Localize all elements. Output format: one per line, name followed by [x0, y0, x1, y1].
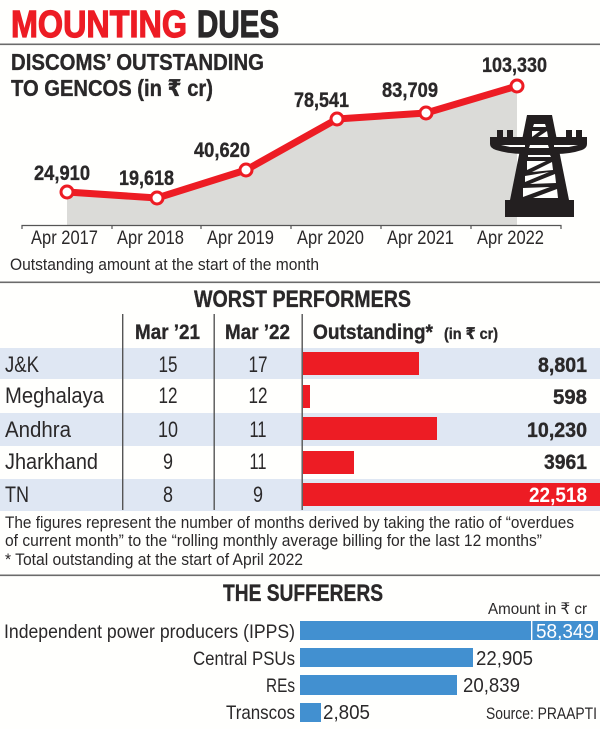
table notes: [5, 514, 574, 569]
table heading: WORST PERFORMERS: [194, 286, 411, 313]
area under line: [67, 86, 517, 225]
x axis: Apr 2021: [387, 228, 454, 249]
data values: 83,709: [382, 79, 438, 102]
data values: [34, 54, 547, 190]
outstanding values: [527, 354, 587, 507]
x axis: Apr 2022: [477, 228, 544, 249]
state names: Meghalaya: [5, 383, 105, 408]
chart heading: DISCOMS’ OUTSTANDING: [11, 49, 264, 75]
column headers: Mar ’22: [225, 321, 290, 344]
category labels: Transcos: [226, 702, 295, 724]
chart footnote: Outstanding amount at the start of the month: [10, 256, 319, 274]
Mar 21 values: 12: [158, 383, 178, 408]
data values: 24,910: [34, 162, 90, 185]
category labels: Independent power producers (IPPS): [4, 621, 295, 643]
column headers: (in ₹ cr): [444, 326, 498, 343]
panel: the sufferers bar chart: [4, 580, 598, 724]
Mar 21 values: 15: [158, 352, 178, 377]
category labels: Central PSUs: [193, 648, 295, 670]
bar values: 2,805: [323, 702, 370, 724]
state names: Jharkhand: [5, 449, 98, 474]
x axis: [22, 226, 561, 249]
chart heading: [11, 49, 264, 101]
Mar 21 values: 8: [163, 482, 173, 507]
table notes: The figures represent the number of months derived by taking the ratio of “overdues: [5, 514, 574, 532]
outstanding values: 10,230: [527, 419, 587, 442]
bar values: 22,905: [476, 648, 533, 670]
blue bars: [300, 621, 598, 722]
data values: 40,620: [194, 139, 250, 162]
Mar 21 values: 10: [158, 417, 178, 442]
outstanding values: 3961: [544, 451, 587, 474]
outstanding values: 598: [553, 386, 587, 409]
Mar 22 values: [248, 352, 268, 507]
outstanding values: 22,518: [529, 484, 587, 507]
outstanding bars: [303, 352, 600, 506]
state names: Andhra: [5, 417, 72, 442]
data values: 103,330: [482, 54, 547, 77]
icon: transmission tower: [490, 115, 587, 217]
bar values: 20,839: [463, 675, 520, 697]
bar values: [323, 621, 594, 724]
panel: discoms outstanding line chart: [10, 49, 587, 274]
bar values: 58,349: [536, 621, 594, 643]
row bands: [0, 348, 600, 511]
state names: TN: [5, 482, 29, 507]
data values: 78,541: [294, 89, 349, 112]
Mar 22 values: 11: [250, 449, 266, 474]
column headers: [135, 321, 498, 344]
table notes: of current month” to the “rolling monthly average billing for the last 12 months”: [5, 532, 542, 550]
x axis: Apr 2017: [31, 228, 98, 249]
sufferers heading: THE SUFFERERS: [223, 580, 383, 607]
x axis: Apr 2018: [117, 228, 184, 249]
column headers: Outstanding*: [313, 321, 434, 344]
table notes: * Total outstanding at the start of April 2022: [5, 551, 303, 569]
Mar 22 values: 9: [253, 482, 263, 507]
unit label: Amount in ₹ cr: [488, 601, 588, 618]
Mar 22 values: 17: [248, 352, 268, 377]
state names: J&K: [5, 352, 39, 377]
chart heading: TO GENCOS (in ₹ cr): [11, 75, 213, 101]
data values: 19,618: [119, 167, 174, 190]
title: MOUNTING: [11, 4, 187, 46]
outstanding values: 8,801: [538, 354, 587, 377]
Mar 22 values: 12: [248, 383, 268, 408]
x axis: Apr 2019: [207, 228, 274, 249]
column headers: Mar ’21: [135, 321, 200, 344]
Mar 21 values: 9: [163, 449, 173, 474]
state names: [5, 352, 105, 507]
category labels: REs: [266, 675, 295, 697]
panel: worst performers table: [0, 286, 600, 569]
Mar 21 values: [158, 352, 178, 507]
category labels: [4, 621, 295, 724]
column dividers: [122, 314, 303, 510]
x axis: Apr 2020: [297, 228, 364, 249]
Mar 22 values: 11: [250, 417, 266, 442]
title: DUES: [197, 4, 279, 46]
red trend line: [61, 80, 523, 204]
